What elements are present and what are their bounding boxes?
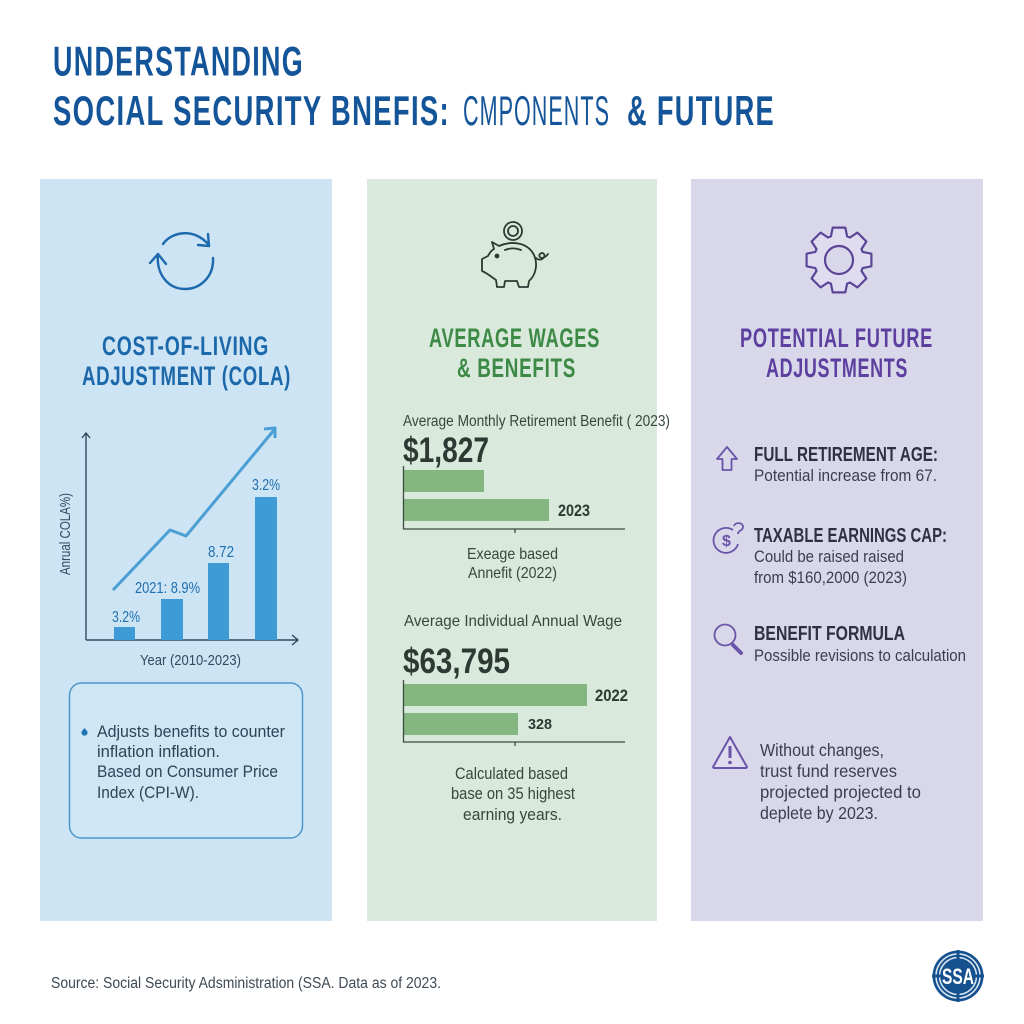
heading: wages: AVERAGE WAGES xyxy=(429,323,600,353)
heading: COLA xyxy=(82,331,291,391)
callout: COLA note: Index (CPI-W). xyxy=(97,783,199,802)
x axis label: Year (2010-2023) xyxy=(140,652,241,669)
chart: annual wage: earning years. xyxy=(463,805,562,824)
chart: monthly retirement benefit: Annefit (2022) xyxy=(468,565,557,582)
chart: annual wage: base on 35 highest xyxy=(451,784,575,803)
icon: SSA logo xyxy=(932,950,984,1002)
item: taxable earnings cap: from $160,2000 (2023) xyxy=(754,569,907,587)
heading: wages: & BENEFITS xyxy=(457,353,576,383)
item: full retirement age: FULL RETIREMENT AGE: xyxy=(754,444,938,466)
bar value labels: 3.2% xyxy=(252,477,280,494)
bar value labels xyxy=(112,477,280,626)
title xyxy=(53,38,775,134)
heading: COLA: COST-OF-LIVING xyxy=(102,331,269,361)
item: full retirement age xyxy=(717,444,938,485)
chart: annual wage: 2022 xyxy=(595,687,628,705)
trend arrow xyxy=(113,428,275,590)
chart: annual wage: Average Individual Annual Wage xyxy=(404,613,622,630)
panel: wages and benefits xyxy=(367,179,670,921)
item: taxable earnings cap: $ xyxy=(722,533,731,550)
callout: COLA note: Based on Consumer Price xyxy=(97,762,278,781)
item: trust fund warning: projected projected to xyxy=(760,782,921,802)
title: & FUTURE xyxy=(627,87,775,134)
bar value labels: 8.72 xyxy=(208,544,234,561)
item: trust fund warning: trust fund reserves xyxy=(760,761,897,781)
chart: annual wage: $63,795 xyxy=(403,642,510,681)
heading: COLA: ADJUSTMENT (COLA) xyxy=(82,361,291,391)
callout: COLA note: Adjusts benefits to counter xyxy=(97,722,285,741)
source note: Source: Social Security Adsministration (SSA. Data as of 2023. xyxy=(51,975,441,992)
callout: COLA note: inflation inflation. xyxy=(97,742,220,761)
icon: gear xyxy=(807,228,871,292)
panel: future adjustments xyxy=(691,179,983,921)
chart: monthly retirement benefit: Average Monthly Retirement Benefit ( 2023) xyxy=(403,413,670,430)
item: taxable earnings cap: Could be raised raised xyxy=(754,548,904,566)
heading: future: ADJUSTMENTS xyxy=(766,353,908,383)
title: UNDERSTANDING xyxy=(53,38,304,84)
y axis label: Anrual COLA%) xyxy=(57,493,74,575)
chart: annual wage: Calculated based xyxy=(455,764,568,783)
item: taxable earnings cap xyxy=(714,523,947,587)
bar chart: annual COLA xyxy=(57,428,298,669)
item: taxable earnings cap: TAXABLE EARNINGS CAP: xyxy=(754,525,947,547)
icon: SSA logo: SSA xyxy=(942,964,974,989)
heading: future: POTENTIAL FUTURE xyxy=(740,323,933,353)
item: benefit formula: BENEFIT FORMULA xyxy=(754,623,905,645)
chart: annual wage: 328 xyxy=(528,717,552,733)
item: benefit formula xyxy=(714,623,966,665)
panel: COLA xyxy=(40,179,332,921)
item: trust fund warning: deplete by 2023. xyxy=(760,803,878,823)
item: trust fund warning: Without changes, xyxy=(760,740,884,760)
heading: future xyxy=(740,323,933,383)
callout: COLA note xyxy=(70,683,302,838)
bar value labels: 2021: 8.9% xyxy=(135,580,200,597)
item: benefit formula: Possible revisions to calculation xyxy=(754,647,966,665)
item: full retirement age: Potential increase from 67. xyxy=(754,467,937,485)
icon: refresh arrows xyxy=(150,233,213,289)
chart: monthly retirement benefit: 2023 xyxy=(558,502,590,520)
heading: wages xyxy=(429,323,600,383)
chart: monthly retirement benefit xyxy=(403,413,670,582)
title: CMPONENTS xyxy=(463,87,610,134)
icon: piggy bank xyxy=(482,222,548,287)
bar value labels: 3.2% xyxy=(112,609,140,626)
chart: monthly retirement benefit: $1,827 xyxy=(403,431,489,470)
item: trust fund warning xyxy=(713,737,921,823)
title: SOCIAL SECURITY BNEFIS: xyxy=(53,87,450,134)
chart: annual wage xyxy=(403,613,628,824)
chart: monthly retirement benefit: Exeage based xyxy=(467,546,558,563)
